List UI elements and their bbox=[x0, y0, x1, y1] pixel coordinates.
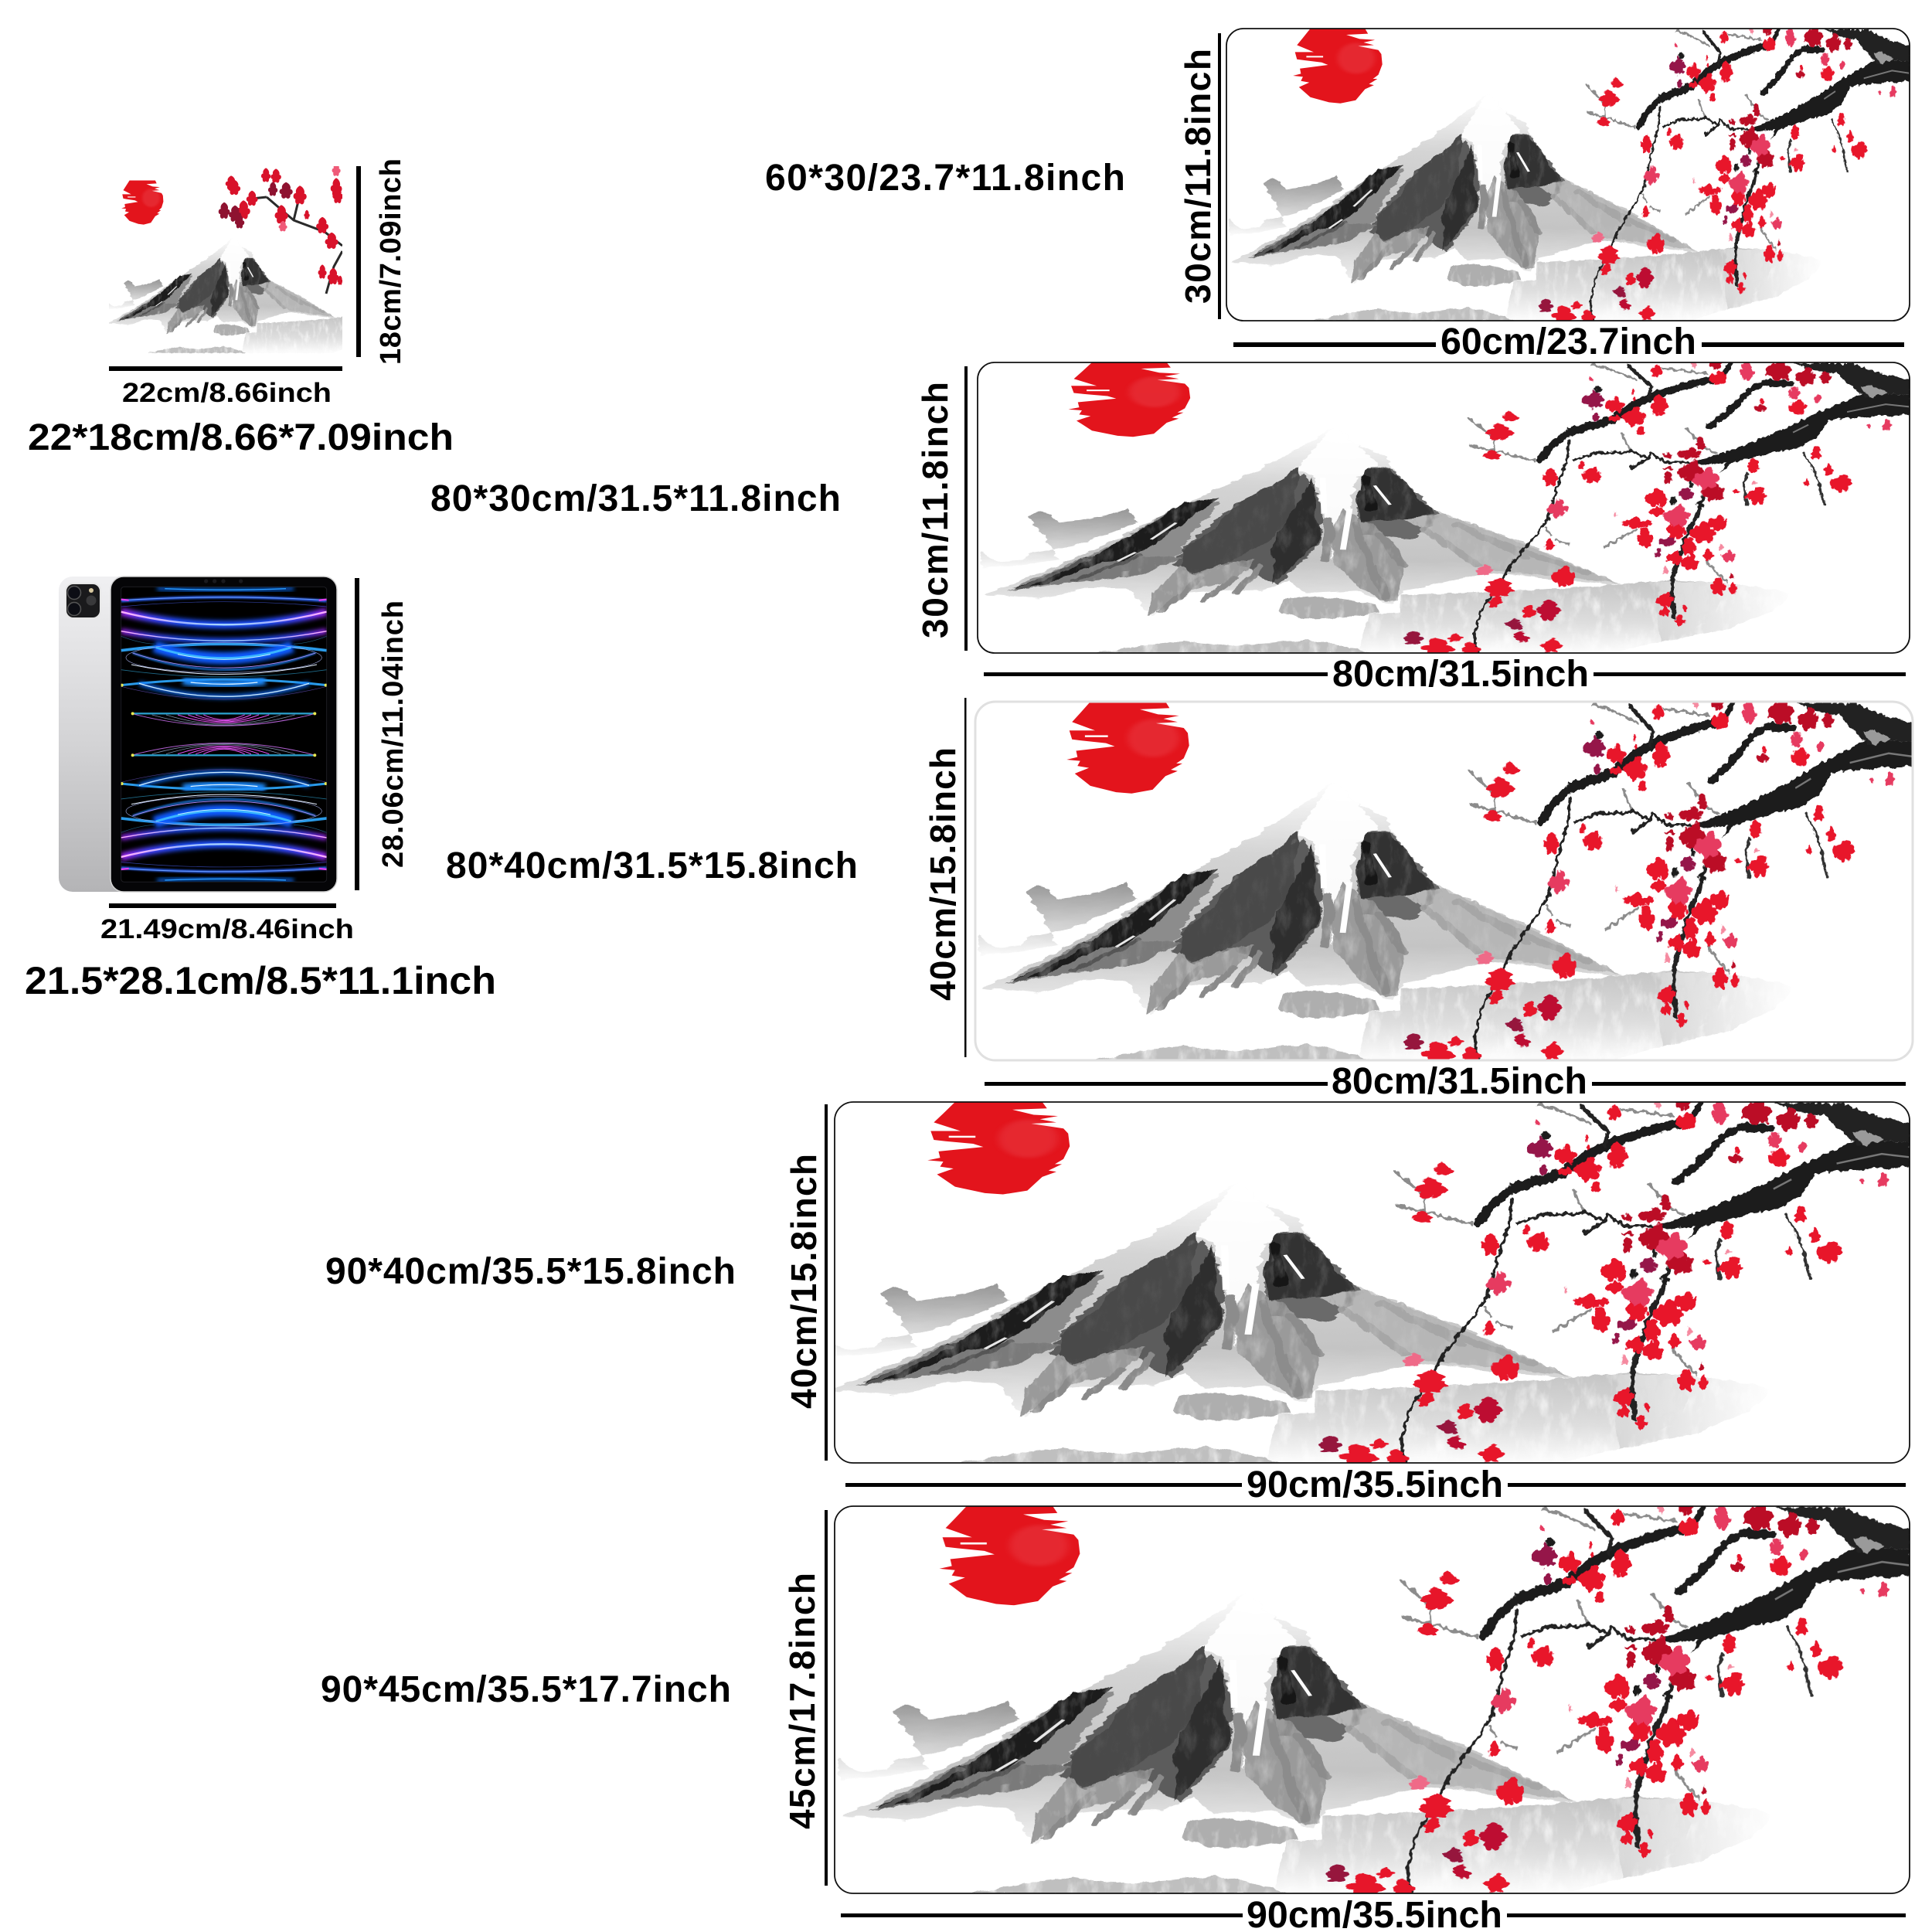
mini artwork: mountain, sun and blossoms bbox=[107, 163, 396, 353]
tablet illustration bbox=[59, 577, 337, 892]
size caption: 21.5*28.1cm/8.5*11.1inch bbox=[25, 959, 496, 1002]
width bar and label bbox=[985, 1061, 1906, 1102]
panel: tablet size reference bbox=[25, 577, 496, 1002]
height bar and label: 45cm/17.8inch bbox=[782, 1573, 822, 1829]
height bar and label bbox=[784, 1104, 828, 1461]
width bar and label: 60cm/23.7inch bbox=[1440, 321, 1696, 362]
width bar and label 21.49cm bbox=[100, 903, 354, 944]
size caption: 80*40cm/31.5*15.8inch bbox=[446, 845, 858, 886]
panel: 60x30 mouse pad bbox=[765, 25, 1910, 362]
panel: 22x18cm small reference mat bbox=[28, 158, 454, 458]
size caption: 22*18cm/8.66*7.09inch bbox=[28, 417, 454, 458]
height bar and label: 30cm/11.8inch bbox=[915, 382, 955, 638]
height bar and label 18cm: 18cm/7.09inch bbox=[375, 158, 407, 365]
mouse pad artwork bbox=[824, 1097, 1910, 1465]
mouse pad outline bbox=[975, 702, 1913, 1060]
size caption: 90*40cm/35.5*15.8inch bbox=[325, 1251, 736, 1292]
width bar and label: 80cm/31.5inch bbox=[1332, 654, 1589, 695]
width bar and label bbox=[1233, 321, 1904, 362]
panel: 80x30 mouse pad bbox=[430, 359, 1910, 695]
width bar and label bbox=[984, 654, 1906, 695]
mouse pad outline bbox=[978, 362, 1910, 653]
height bar and label: 30cm/11.8inch bbox=[1178, 49, 1218, 304]
tablet front screen bbox=[111, 577, 337, 892]
width bar and label bbox=[845, 1464, 1906, 1505]
size caption: 90*45cm/35.5*17.7inch bbox=[321, 1669, 731, 1710]
tablet back shell bbox=[59, 577, 213, 892]
mouse pad artwork bbox=[980, 359, 1910, 655]
height bar and label: 40cm/15.8inch bbox=[923, 747, 963, 1001]
height bar and label bbox=[915, 366, 968, 651]
size caption: 60*30/23.7*11.8inch bbox=[765, 158, 1125, 199]
width bar and label bbox=[841, 1895, 1906, 1932]
mouse pad outline bbox=[1226, 29, 1910, 321]
height bar and label: 40cm/15.8inch bbox=[784, 1154, 824, 1409]
mouse pad outline bbox=[835, 1102, 1910, 1463]
panel: 80x40 mouse pad bbox=[446, 697, 1913, 1102]
mouse pad artwork bbox=[837, 1501, 1910, 1896]
height bar and label 28.06cm bbox=[355, 578, 410, 890]
camera module bbox=[66, 583, 100, 618]
height bar and label 28.06cm: 28.06cm/11.04inch bbox=[377, 600, 410, 868]
mouse pad artwork bbox=[978, 697, 1913, 1063]
width bar and label 21.49cm: 21.49cm/8.46inch bbox=[100, 914, 354, 944]
mouse pad outline bbox=[835, 1506, 1910, 1893]
height bar and label bbox=[782, 1510, 828, 1886]
width bar and label 22cm: 22cm/8.66inch bbox=[122, 378, 332, 408]
panel: 90x45 mouse pad bbox=[321, 1501, 1910, 1932]
mouse pad artwork bbox=[1228, 25, 1910, 323]
width bar and label: 80cm/31.5inch bbox=[1332, 1061, 1587, 1102]
width bar and label 22cm bbox=[109, 366, 342, 408]
size caption: 80*30cm/31.5*11.8inch bbox=[430, 478, 841, 519]
height bar and label 18cm bbox=[356, 158, 407, 365]
panel: 90x40 mouse pad bbox=[325, 1097, 1910, 1505]
width bar and label: 90cm/35.5inch bbox=[1247, 1464, 1503, 1505]
